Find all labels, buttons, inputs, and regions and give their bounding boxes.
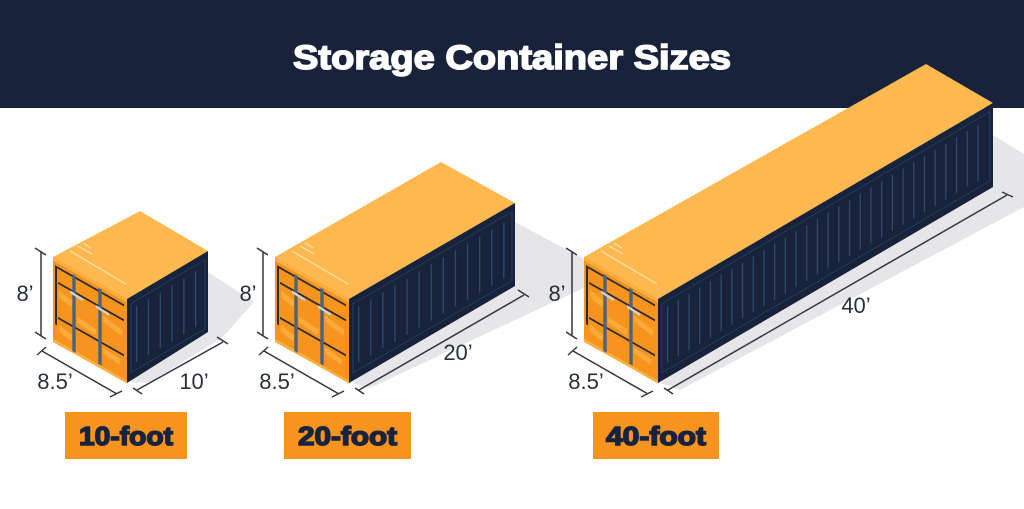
label: 10-foot: 10-foot bbox=[79, 421, 173, 451]
dimensions: 20-foot: 20’ bbox=[443, 340, 473, 365]
title: Storage Container Sizes bbox=[293, 39, 731, 77]
dimensions: 20-foot bbox=[239, 248, 529, 397]
label: 20-foot bbox=[284, 412, 411, 459]
side face bbox=[658, 103, 993, 383]
top face bbox=[53, 211, 208, 299]
label: 10-foot bbox=[65, 412, 187, 459]
container: 40-foot bbox=[584, 64, 1024, 390]
shadow bbox=[660, 135, 1024, 390]
label: 40-foot bbox=[593, 412, 719, 459]
dimensions: 40-foot: 8’ bbox=[548, 281, 566, 306]
label: 20-foot: 20-foot bbox=[298, 421, 397, 451]
dimensions: 10-foot: 8’ bbox=[16, 281, 34, 306]
side face bbox=[127, 251, 208, 383]
front face bbox=[53, 257, 127, 383]
side face bbox=[349, 203, 515, 383]
front face bbox=[275, 257, 349, 383]
container: 20-foot bbox=[275, 162, 590, 388]
dimensions: 10-foot: 8.5’ bbox=[37, 369, 73, 394]
dimensions: 10-foot bbox=[16, 248, 228, 397]
dimensions: 40-foot: 8.5’ bbox=[568, 369, 604, 394]
doors bbox=[584, 259, 658, 382]
top face bbox=[584, 64, 993, 299]
doors bbox=[53, 259, 127, 382]
dimensions: 40-foot bbox=[548, 192, 1013, 397]
top face bbox=[275, 162, 515, 299]
doors bbox=[275, 259, 349, 382]
roof highlights bbox=[601, 243, 657, 284]
shadow bbox=[130, 272, 254, 383]
roof highlights bbox=[292, 243, 348, 284]
front face bbox=[584, 257, 658, 383]
dimensions: 20-foot: 8’ bbox=[239, 281, 257, 306]
dimensions: 10-foot: 10’ bbox=[179, 369, 209, 394]
shadow bbox=[352, 222, 590, 388]
dimensions: 40-foot: 40’ bbox=[841, 293, 871, 318]
header band bbox=[0, 0, 1024, 108]
roof highlights bbox=[70, 243, 126, 284]
container: 10-foot bbox=[53, 211, 254, 383]
dimensions: 20-foot: 8.5’ bbox=[259, 369, 295, 394]
label: 40-foot: 40-foot bbox=[606, 421, 706, 451]
